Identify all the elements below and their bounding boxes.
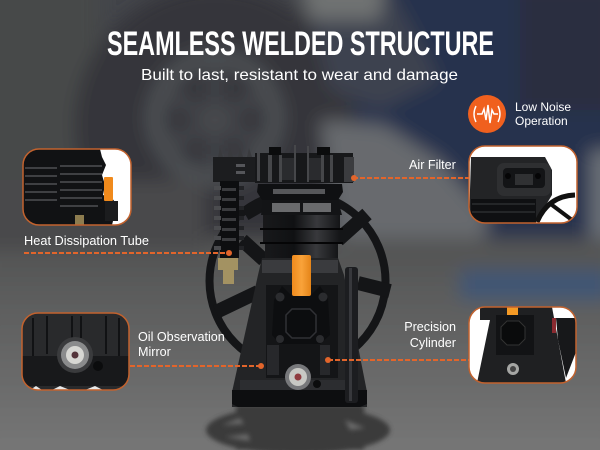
flywheel [210,193,390,369]
pump shadow on floor [206,405,390,450]
icon: low noise [468,95,506,133]
subtitle: Built to last, resistant to wear and damage [141,67,458,84]
leader line: oil observation mirror [130,363,264,369]
inset: air filter [469,146,577,223]
air compressor pump [210,145,390,407]
leader line: precision cylinder [325,357,469,363]
inset border: air filter [469,146,577,223]
neck [257,184,343,200]
label: oil observation mirror: Mirror [138,345,171,359]
inset border: oil observation mirror [22,313,129,390]
leader line: air filter [351,175,469,181]
crankcase [232,258,367,407]
cooling fins on cylinder [260,200,343,258]
inset: heat dissipation tube [23,149,131,225]
label: precision cylinder: Precision [404,320,456,334]
label: precision cylinder: Cylinder [410,336,456,350]
brass fitting [218,258,238,284]
side tube [345,267,358,403]
label: low noise operation: Operation [515,114,568,128]
label: heat dissipation tube: Heat Dissipation Tube [24,233,149,248]
inset: precision cylinder [469,307,576,383]
oil sight glass [285,364,321,390]
label: oil observation mirror: Oil Observation [138,330,225,344]
inset border: heat dissipation tube [23,149,131,225]
octagonal port [286,309,316,338]
inset border: precision cylinder [469,307,576,383]
left head block with fins [213,148,255,182]
main cylinder head [255,145,354,183]
heat dissipation tube [214,181,244,258]
label: air filter: Air Filter [409,158,456,172]
label: low noise operation: Low Noise [515,100,571,114]
orange dipstick cap [292,255,311,296]
leader line: heat dissipation tube [24,250,232,256]
inset: oil observation mirror [22,313,129,390]
